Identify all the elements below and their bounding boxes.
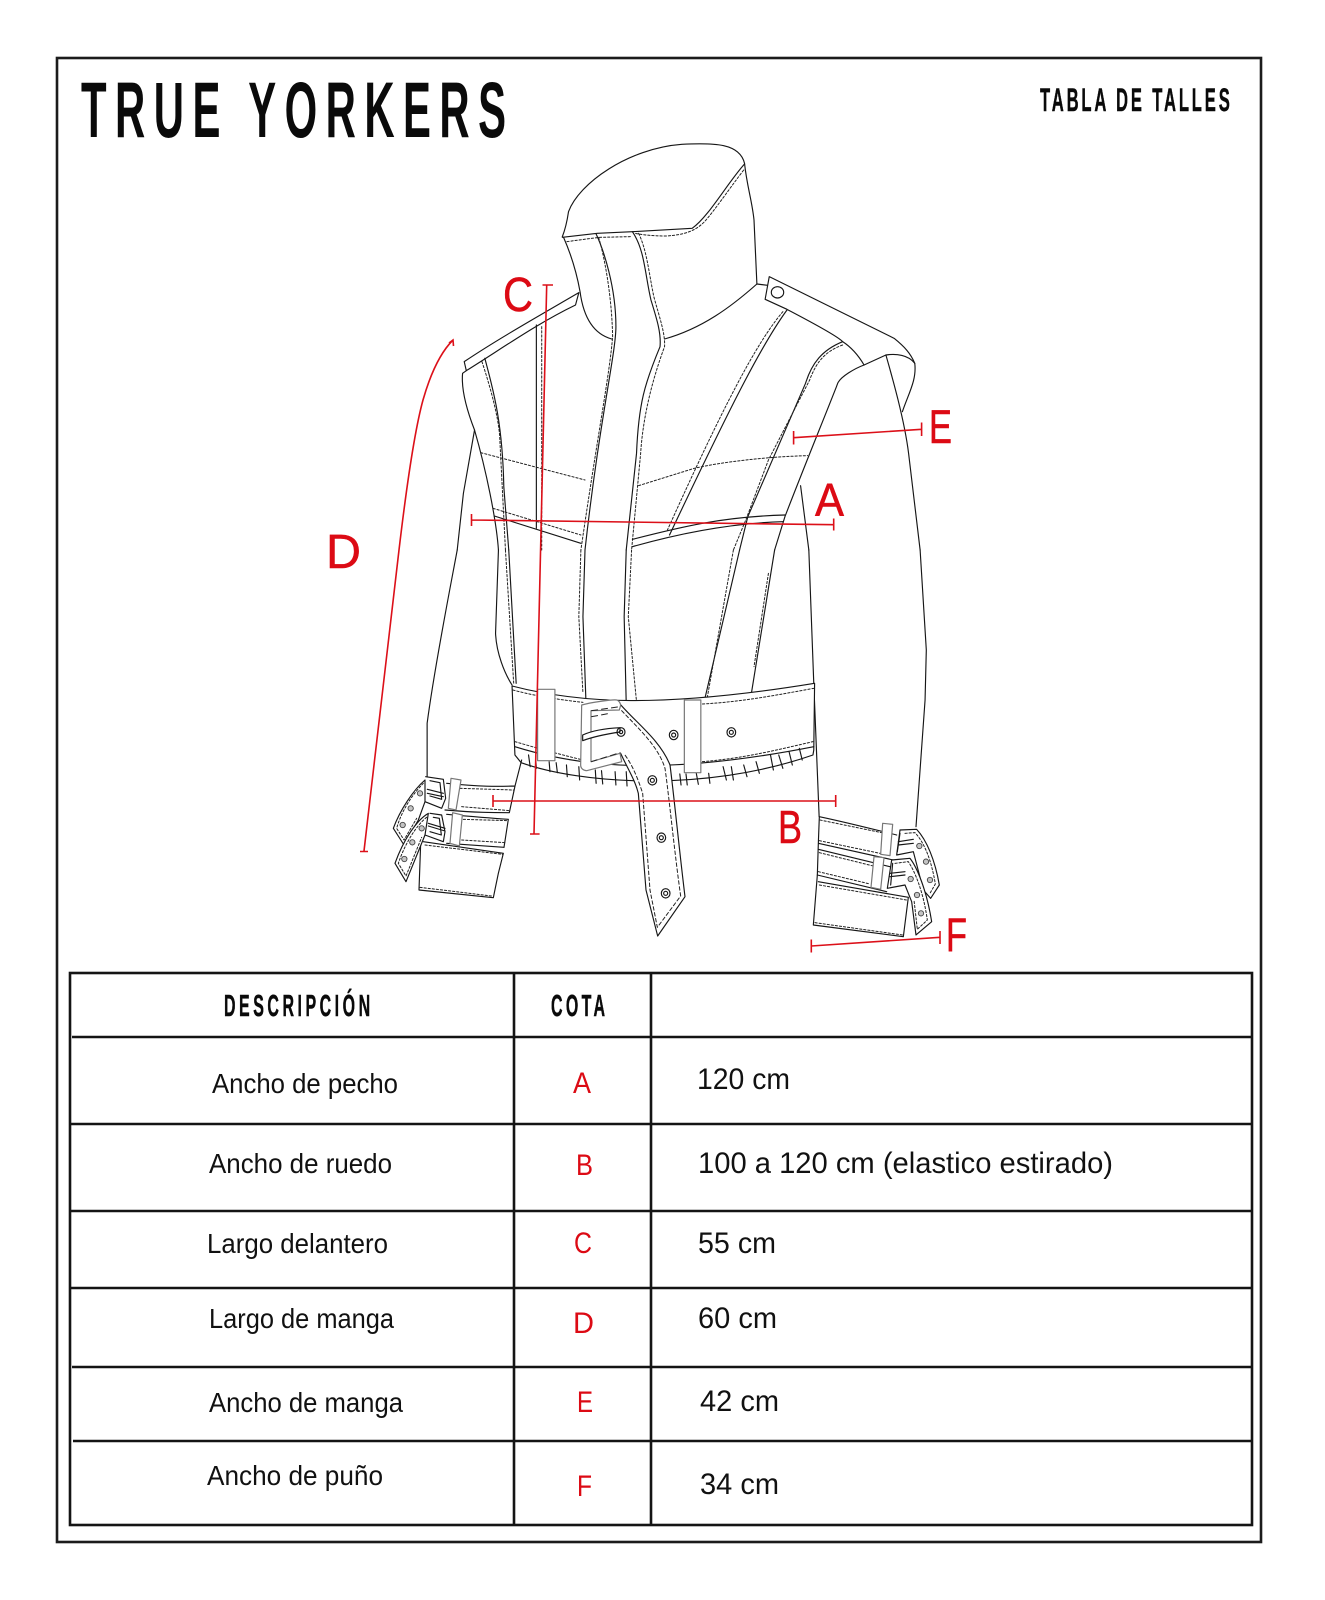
belt buckle and hanging tail — [581, 700, 736, 936]
table header: descripcion: DESCRIPCIÓN — [224, 988, 370, 1024]
row B: Ancho de ruedo — [209, 1148, 392, 1179]
row F: 34 cm — [700, 1468, 779, 1501]
row D: 60 cm — [698, 1302, 777, 1335]
row C — [207, 1227, 776, 1260]
row D: Largo de manga — [209, 1303, 394, 1334]
upper jacket: collar, shoulders and chest — [457, 144, 920, 550]
measurement F: cuff width: F — [946, 908, 967, 961]
jacket technical drawing — [393, 144, 939, 937]
row C: 55 cm — [698, 1227, 776, 1260]
icon: shoulder strap eyelet — [771, 287, 784, 298]
left cuff with double buckle straps — [393, 760, 522, 898]
measurement E: sleeve width — [794, 400, 952, 453]
belt loop left — [538, 689, 555, 761]
cuff keeper upper — [881, 823, 893, 856]
row A: 120 cm — [697, 1063, 790, 1096]
belt loop right — [684, 700, 701, 773]
row A: Ancho de pecho — [212, 1068, 398, 1099]
measurement D: sleeve length: D — [326, 526, 361, 579]
measurement A: chest width: A — [815, 474, 844, 526]
cuff keeper upper — [448, 778, 461, 810]
row F: Ancho de puño — [207, 1460, 383, 1491]
table header: cota: COTA — [551, 990, 605, 1024]
ribbed hem lines — [529, 748, 802, 786]
measurement A: chest width — [472, 474, 844, 530]
row A — [212, 1063, 790, 1100]
row F — [207, 1460, 779, 1503]
heading: tabla de talles: TABLA DE TALLES — [1040, 83, 1230, 119]
title: brand name: TRUE YORKERS — [81, 67, 506, 154]
right cuff with double buckle straps — [813, 817, 939, 937]
row E: 42 cm — [700, 1385, 779, 1418]
lower jacket: waist, belt and ribbing — [427, 550, 926, 827]
measurement B: hem width: B — [778, 801, 802, 853]
belt eyelets — [617, 728, 625, 736]
row A: A — [573, 1067, 591, 1100]
row D: D — [573, 1307, 594, 1340]
row E — [209, 1385, 779, 1419]
row C: Largo delantero — [207, 1228, 388, 1259]
row B: 100 a 120 cm (elastico estirado) — [698, 1147, 1113, 1180]
measurement D: sleeve length — [326, 340, 454, 852]
row F: F — [577, 1470, 592, 1503]
measurement C: front length: C — [503, 269, 533, 322]
measurement C: front length — [503, 269, 553, 834]
row C: C — [574, 1227, 592, 1260]
size table — [70, 973, 1252, 1525]
cuff keeper lower — [450, 813, 462, 846]
measurement E: sleeve width: E — [929, 400, 952, 453]
table grid — [70, 973, 1252, 1525]
measurement F: cuff width — [811, 908, 967, 961]
row D — [209, 1302, 777, 1340]
cuff keeper lower — [871, 857, 884, 889]
measurement B: hem width — [493, 795, 836, 853]
row E: E — [577, 1386, 593, 1419]
row E: Ancho de manga — [209, 1387, 403, 1418]
row B: B — [576, 1149, 593, 1182]
row B — [209, 1147, 1113, 1182]
